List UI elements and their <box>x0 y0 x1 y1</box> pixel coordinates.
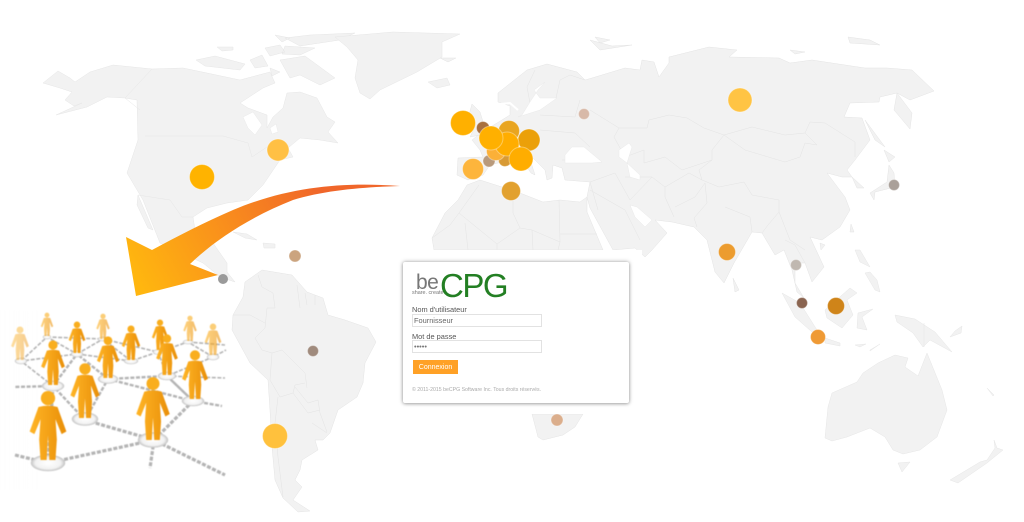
land: oceania and southeast asia <box>782 250 1003 483</box>
network links <box>14 337 226 475</box>
password field <box>412 340 542 353</box>
data bubbles <box>190 88 900 448</box>
logo: CPG <box>440 267 507 304</box>
land: africa <box>432 180 603 440</box>
password label: Mot de passe <box>412 332 456 341</box>
username label: Nom d'utilisateur <box>412 305 467 314</box>
land: eurasia <box>440 37 934 298</box>
password field: ••••• <box>414 342 427 351</box>
white backing behind login card <box>430 250 642 414</box>
central america bubble <box>218 274 228 284</box>
login card <box>403 262 629 403</box>
login button <box>413 360 458 374</box>
username field: Fournisseur <box>414 316 453 325</box>
logo: share. create <box>412 290 443 296</box>
land: south america <box>232 270 376 512</box>
seas and lakes <box>243 82 652 227</box>
node discs <box>15 335 219 471</box>
login button: Connexion <box>419 364 452 371</box>
people network illustration <box>0 310 228 490</box>
land: north america <box>43 32 460 282</box>
logo: be <box>416 271 438 294</box>
copyright: © 2011-2015 beCPG Software Inc. Tous droits réservés. <box>412 387 541 393</box>
username field <box>412 314 542 327</box>
arrow <box>126 185 400 296</box>
people figures <box>11 313 221 460</box>
